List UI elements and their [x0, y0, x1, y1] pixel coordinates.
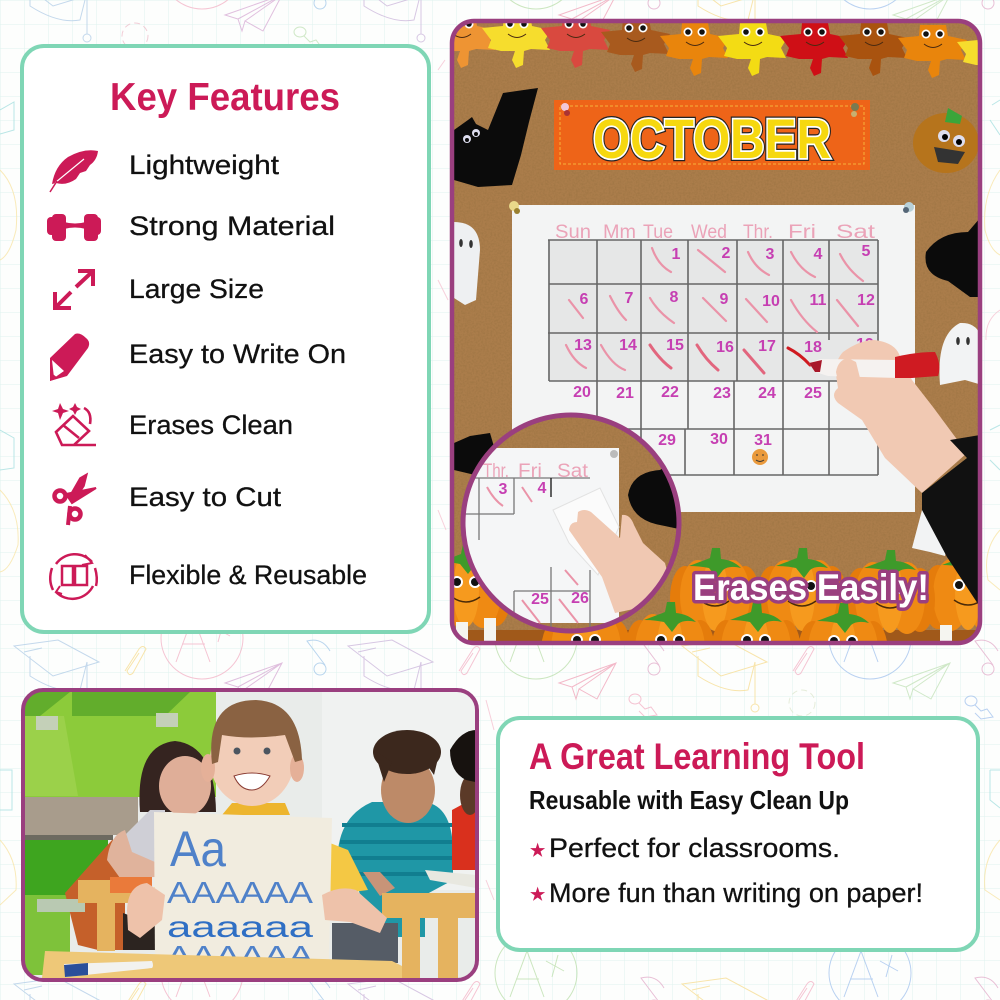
panel: key features	[22, 46, 429, 632]
day numbers: 19	[856, 336, 874, 353]
day numbers: 29	[658, 432, 676, 449]
day numbers: 6	[580, 291, 589, 308]
row of pumpkins	[454, 544, 978, 641]
weekday labels: Thr.	[743, 222, 773, 243]
day numbers: 8	[670, 289, 679, 306]
wiping cloth	[553, 488, 619, 575]
day numbers: 10	[762, 293, 780, 310]
feature: strong material: Strong Material	[129, 211, 335, 241]
marker	[809, 352, 940, 378]
right table	[382, 870, 477, 980]
panel: cork board photo	[450, 18, 982, 646]
boy holding paper	[148, 700, 398, 963]
weekday labels	[556, 224, 875, 238]
wiping hand	[569, 510, 672, 613]
inset labels: Sat	[557, 461, 589, 482]
calendar whiteboard sheet	[512, 205, 915, 512]
calendar grid	[548, 240, 878, 475]
pins	[509, 201, 914, 214]
heading: learning tool: A Great Learning Tool	[529, 736, 865, 777]
day numbers: 12	[857, 292, 875, 309]
day numbers: 31	[754, 432, 772, 449]
glitter pumpkin	[913, 108, 979, 173]
day numbers: 23	[713, 385, 731, 402]
ghost right	[939, 323, 982, 385]
inset labels	[483, 463, 588, 477]
paper with letters: AAAAAA	[167, 940, 314, 970]
icon: reusable book	[50, 554, 97, 599]
inset circle: erasing: 25	[531, 591, 549, 608]
subheading: Reusable with Easy Clean Up	[529, 785, 849, 815]
caption: erases easily: Erases Easily!	[693, 567, 929, 608]
day numbers: 25	[804, 385, 822, 402]
feature: easy to cut: Easy to Cut	[129, 482, 282, 512]
day numbers: 21	[616, 385, 634, 402]
heading: key features: Key Features	[110, 76, 340, 119]
day numbers: 13	[574, 337, 592, 354]
day numbers: 16	[716, 339, 734, 356]
child far right	[450, 730, 475, 870]
whiteboard marker	[64, 961, 153, 977]
paper with letters: aaaaaa	[167, 911, 313, 944]
weekday labels: Mm	[603, 222, 636, 243]
orange strip behind inset	[546, 416, 584, 422]
bullet: more fun: More fun than writing on paper!	[549, 878, 923, 908]
feature: easy to write on: Easy to Write On	[129, 339, 346, 369]
girl in background	[107, 741, 216, 878]
hand writing with marker	[809, 340, 982, 610]
inset grid	[462, 478, 590, 632]
erased sheet	[462, 448, 619, 623]
panel: classroom photo	[23, 690, 480, 980]
room background	[23, 690, 477, 980]
day numbers: 3	[766, 246, 775, 263]
icon: feather	[50, 150, 98, 192]
inset circle: erasing	[460, 412, 684, 636]
day numbers: 30	[710, 431, 728, 448]
icon: pencil	[50, 334, 89, 381]
weekday labels: Sun	[555, 222, 591, 243]
icon: eraser with sparkles	[52, 403, 96, 445]
bullet: classrooms: ★	[530, 841, 546, 860]
feature: flexible and reusable: Flexible & Reusable	[129, 560, 367, 590]
feature: erases clean: Erases Clean	[129, 410, 293, 440]
paper with letters	[154, 812, 332, 970]
day numbers	[573, 243, 875, 449]
black cat shape right	[925, 218, 980, 297]
cork background	[452, 21, 980, 643]
left table	[78, 877, 155, 951]
weekday labels: Fri	[788, 222, 816, 243]
day numbers: 9	[720, 291, 729, 308]
day numbers: 18	[804, 339, 822, 356]
day numbers: 7	[625, 290, 634, 307]
inset circle: erasing: 26	[571, 590, 589, 607]
icon: dumbbell	[47, 214, 101, 241]
paper with letters: Aa	[170, 821, 226, 877]
month banner: OCTOBER	[593, 107, 831, 170]
bat in inset	[628, 469, 676, 528]
day numbers: 22	[661, 384, 679, 401]
month banner: OCTOBER	[593, 107, 831, 170]
feature: lightweight: Lightweight	[129, 150, 280, 180]
icon: expand arrows	[55, 271, 93, 308]
weekday labels: Sat	[836, 222, 876, 243]
inset labels: Thr.	[483, 461, 509, 482]
day numbers: 1	[672, 246, 681, 263]
day numbers: 4	[814, 246, 823, 263]
paper with letters: AAAAAA	[167, 875, 313, 910]
hands on paper	[127, 883, 387, 938]
sleeve	[922, 458, 978, 604]
day numbers: 15	[666, 337, 684, 354]
day numbers: 17	[758, 338, 776, 355]
feature: large size: Large Size	[129, 274, 264, 304]
day numbers: 20	[573, 384, 591, 401]
day numbers: 2	[722, 245, 731, 262]
small pumpkin sticker	[752, 449, 768, 465]
weekday labels: Tue	[643, 222, 673, 243]
bullet: classrooms: Perfect for classrooms.	[549, 833, 840, 863]
boy on the right	[338, 730, 453, 937]
inset labels: Fri	[518, 461, 542, 482]
inset circle: erasing: 4	[538, 480, 547, 497]
handwriting slashes	[566, 248, 863, 373]
inset circle: erasing: 3	[499, 481, 508, 498]
black bat lower left	[454, 433, 495, 475]
day numbers: 11	[810, 292, 827, 309]
ghost lower right	[912, 510, 946, 556]
front desk	[42, 951, 402, 978]
maple leaf garland	[454, 23, 978, 78]
bat	[454, 88, 538, 187]
day numbers: 14	[619, 337, 637, 354]
weekday labels: Wed	[691, 222, 727, 243]
ghost left	[454, 222, 480, 305]
panel: a great learning tool	[498, 718, 978, 950]
day numbers: 5	[862, 243, 871, 260]
bullet: more fun: ★	[530, 885, 546, 904]
day numbers: 24	[758, 385, 776, 402]
icon: scissors	[54, 474, 96, 525]
